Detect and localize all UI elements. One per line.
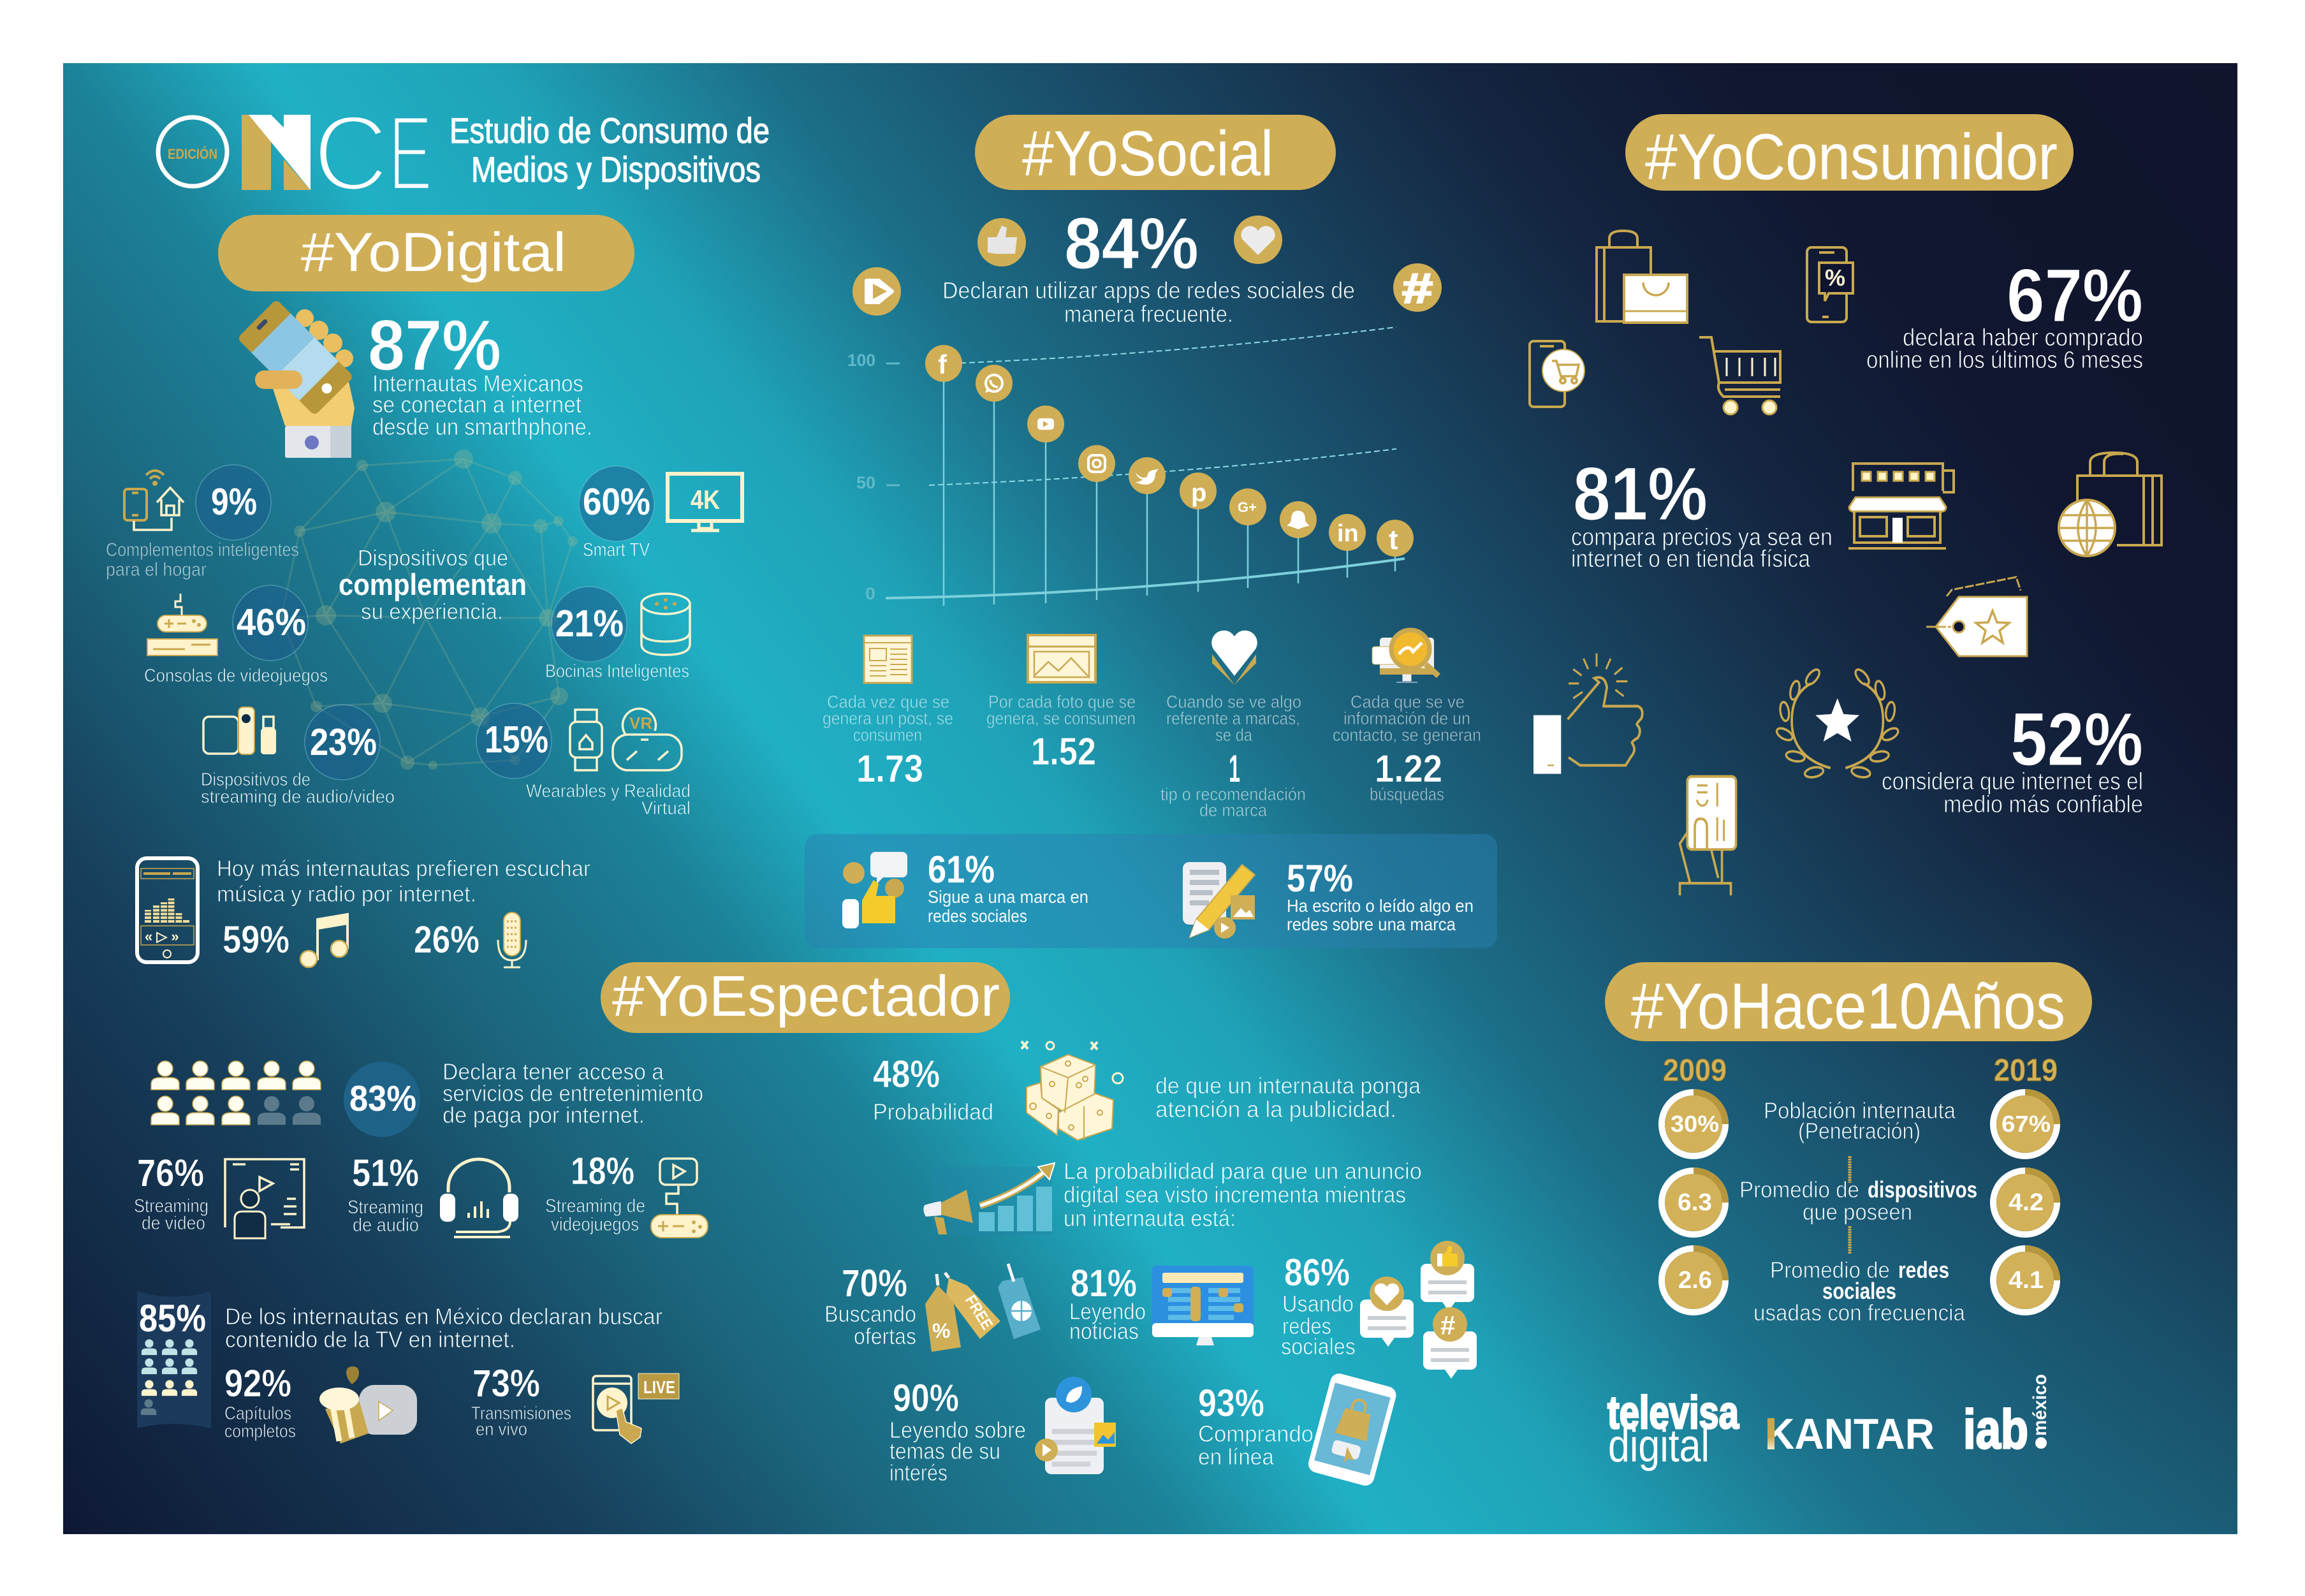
text: hoy más internautas: Hoy más internautas prefieren escuchar bbox=[217, 856, 590, 881]
icon: phone with cart bubble bbox=[1530, 341, 1584, 407]
text: cuando se ve algo 1 tip: de marca bbox=[1199, 800, 1267, 820]
stat: 81% leyendo noticias bbox=[1069, 1262, 1146, 1344]
text: cuando se ve algo 1 tip: 1 bbox=[1229, 747, 1240, 790]
stat: 67%: 67% bbox=[2007, 254, 2143, 338]
stat: 76% streaming de video: de video bbox=[142, 1213, 205, 1234]
stat: 15% wearables y realidad virtual: Virtual bbox=[641, 798, 691, 819]
stat: 26% radio bbox=[414, 912, 526, 967]
stat: 92% capítulos completos: 92% bbox=[224, 1362, 291, 1405]
stat: 81% leyendo noticias: 81% bbox=[1071, 1262, 1137, 1305]
logo: ONCE edición: E bbox=[388, 93, 432, 213]
chart: social app usage: f bbox=[938, 349, 948, 379]
stat: 18% streaming de videojuegos: videojuegos bbox=[551, 1214, 639, 1235]
text: cada que se ve 1.22 bbox=[1333, 692, 1481, 804]
stat: 57%: redes sobre una marca bbox=[1287, 914, 1456, 934]
text: declaran utilizar apps bbox=[942, 277, 1355, 327]
logo: televisa digital: televisa bbox=[1607, 1387, 1739, 1439]
text: cada que se ve 1.22: Cada que se ve bbox=[1350, 692, 1465, 712]
stat: 48% probabilidad: 48% bbox=[873, 1053, 940, 1095]
stat: 90% leyendo sobre temas: Leyendo sobre bbox=[889, 1417, 1026, 1443]
stat: 51% streaming de audio: Streaming bbox=[348, 1197, 423, 1218]
stat: 83% bbox=[344, 1062, 420, 1137]
icon: hand holding smartphone bbox=[237, 299, 355, 458]
stat: 67%: online en los últimos 6 meses bbox=[1866, 347, 2143, 374]
stat: 73% transmisiones en vivo bbox=[471, 1362, 571, 1440]
text: por cada foto 1.52 bbox=[986, 692, 1136, 773]
stat: 59% music: 59% bbox=[223, 918, 289, 961]
axis labels: 100 bbox=[847, 351, 875, 370]
stat: 61%: Sigue a una marca en bbox=[928, 887, 1088, 907]
rings: 2009 values: 6.3 bbox=[1678, 1189, 1712, 1216]
stat: 73% transmisiones en vivo: Transmisiones bbox=[471, 1403, 571, 1424]
text: de los internautas en México bbox=[225, 1303, 662, 1352]
stat: 52% bbox=[1882, 698, 2143, 818]
stat: 76% streaming de video: Streaming bbox=[134, 1196, 209, 1217]
stat: 86% usando redes sociales: 86% bbox=[1284, 1251, 1350, 1294]
text: promedio de dispositivos: que poseen bbox=[1803, 1199, 1912, 1225]
panel: YoEspectador bbox=[134, 962, 1477, 1488]
text: promedio de redes sociales: sociales bbox=[1822, 1278, 1896, 1304]
icon: popcorn and screen bbox=[319, 1366, 417, 1444]
chart: social app usage: in bbox=[1337, 520, 1359, 547]
stat: 81%: 81% bbox=[1573, 452, 1708, 536]
text: promedio de dispositivos bbox=[1739, 1176, 1977, 1225]
percentage circles bbox=[196, 465, 654, 780]
panel: YoDigital bbox=[106, 215, 742, 967]
stat: 61%: redes sociales bbox=[928, 906, 1027, 926]
stat: 70% buscando ofertas: Buscando bbox=[824, 1301, 916, 1327]
stat: 51% streaming de audio: 51% bbox=[352, 1152, 419, 1194]
rings: 2019 values: 4.2 bbox=[2009, 1189, 2044, 1216]
stat: 15% wearables y realidad virtual: 15% bbox=[485, 719, 548, 761]
text: internautas mexicanos: se conectan a internet bbox=[372, 392, 582, 418]
stat: 92% capítulos completos: Capítulos bbox=[224, 1403, 291, 1424]
stat: 60% Smart TV: 60% bbox=[583, 481, 650, 523]
axis labels: 50 bbox=[856, 473, 875, 492]
stat: 18% streaming de videojuegos bbox=[545, 1150, 645, 1235]
heading: #YoSocial: #YoSocial bbox=[1022, 118, 1273, 189]
icon: streaming devices bbox=[203, 707, 276, 754]
stat: 57%: 57% bbox=[1287, 857, 1353, 900]
text: cuando se ve algo 1 tip: referente a marcas, bbox=[1166, 708, 1300, 728]
stat: 9% complementos inteligentes: Complementos inteligentes bbox=[106, 539, 299, 560]
icon: 4K TV bbox=[668, 474, 742, 531]
heading: #YoDigital: #YoDigital bbox=[301, 222, 566, 283]
text: declaran utilizar apps: Declaran utilizar apps de redes sociales de bbox=[942, 277, 1355, 304]
text: de que un internauta: atención a la publicidad. bbox=[1155, 1096, 1396, 1122]
stat: 76% streaming de video bbox=[134, 1152, 209, 1234]
text: declara tener acceso bbox=[443, 1058, 703, 1128]
stat: 67% bbox=[1866, 254, 2143, 374]
stat: 57% bbox=[1287, 857, 1474, 934]
stat: 90% leyendo sobre temas bbox=[889, 1377, 1026, 1486]
stat: 81% bbox=[1571, 452, 1833, 573]
icon: document with leaf bbox=[1035, 1377, 1116, 1474]
icon: social bubbles bbox=[1360, 1241, 1477, 1379]
icon: headphones bbox=[440, 1159, 518, 1237]
text: promedio de dispositivos: dispositivos bbox=[1868, 1176, 1977, 1203]
stat: 93% comprando en línea: 93% bbox=[1198, 1382, 1264, 1424]
stat: 86% usando redes sociales bbox=[1281, 1251, 1356, 1359]
text: de los internautas en México: De los internautas en México declaran buscar bbox=[225, 1303, 662, 1329]
text: internautas mexicanos: desde un smarthphone. bbox=[372, 414, 592, 440]
text: cuando se ve algo 1 tip bbox=[1160, 692, 1306, 820]
icon: monitor with ads bbox=[1152, 1266, 1254, 1345]
stat: 23% dispositivos de streaming: streaming de audio/video bbox=[201, 787, 395, 807]
stat: 90% leyendo sobre temas: temas de su bbox=[889, 1438, 1000, 1464]
stat: 9% complementos inteligentes: 9% bbox=[211, 481, 257, 523]
text: internautas mexicanos: Internautas Mexicanos bbox=[372, 370, 583, 397]
icon: heart bbox=[1211, 631, 1257, 685]
stat: 81% leyendo noticias: Leyendo bbox=[1069, 1298, 1146, 1324]
icon: store bbox=[1848, 464, 1954, 548]
text: la probabilidad: un internauta está: bbox=[1064, 1205, 1236, 1231]
stat: 81% leyendo noticias: noticias bbox=[1069, 1318, 1139, 1344]
stat: 70% buscando ofertas: ofertas bbox=[854, 1323, 916, 1349]
banner: 85% audience bbox=[137, 1291, 211, 1428]
text: hoy más internautas: música y radio por internet. bbox=[217, 882, 476, 907]
heading: #YoDigital bbox=[218, 215, 634, 291]
text: la probabilidad: digital sea visto incrementa mientras bbox=[1064, 1182, 1406, 1208]
people grid 83% bbox=[151, 1061, 321, 1125]
stat: 18% streaming de videojuegos: 18% bbox=[571, 1150, 634, 1192]
logo: iab méxico: méxico bbox=[2030, 1374, 2051, 1436]
stat: 92% capítulos completos bbox=[224, 1362, 296, 1442]
icon: price tags: FREE bbox=[962, 1292, 996, 1333]
stat: 86% usando redes sociales: sociales bbox=[1281, 1333, 1356, 1359]
banner: 85% audience: 85% bbox=[139, 1297, 206, 1340]
panel: YoSocial bbox=[805, 115, 1497, 948]
stat: 23% dispositivos de streaming: 23% bbox=[310, 721, 377, 763]
icon: megaphone and growth bars bbox=[923, 1163, 1055, 1235]
heading: #YoConsumidor: #YoConsumidor bbox=[1645, 121, 2058, 193]
icon: phone with shopping bag bbox=[1306, 1372, 1398, 1488]
logo: iab méxico bbox=[1963, 1374, 2051, 1460]
stat: 21% bocinas inteligentes bbox=[545, 603, 689, 682]
text: de que un internauta: de que un internauta ponga bbox=[1155, 1073, 1421, 1099]
stat: 81%: internet o en tienda física bbox=[1571, 546, 1811, 573]
icon: live stream: LIVE bbox=[643, 1377, 675, 1397]
icon: shopping cart bbox=[1699, 337, 1780, 414]
text: dispositivos que complementan su experiencia bbox=[339, 546, 527, 624]
logo: ONCE edición: C bbox=[313, 93, 388, 213]
text: declara tener acceso: Declara tener acceso a bbox=[443, 1058, 664, 1085]
text: declara tener acceso: de paga por internet. bbox=[443, 1102, 645, 1128]
text: de los internautas en México: contenido de la TV en internet. bbox=[225, 1326, 515, 1352]
stat: 52%: considera que internet es el bbox=[1882, 768, 2143, 795]
stat: 76% streaming de video: 76% bbox=[137, 1152, 204, 1194]
stat: 15% wearables y realidad virtual: Wearables y Realidad bbox=[526, 781, 691, 802]
text: cada vez que se genera un post 1.73: 1.73 bbox=[856, 747, 923, 790]
stat: 86% usando redes sociales: redes bbox=[1282, 1313, 1331, 1339]
rings: 2019 values: 4.1 bbox=[2009, 1267, 2044, 1294]
stat: 70% buscando ofertas: 70% bbox=[842, 1262, 907, 1305]
icon: pencil and document bbox=[1183, 862, 1255, 939]
text: cuando se ve algo 1 tip: Cuando se ve algo bbox=[1166, 692, 1301, 712]
text: internautas mexicanos bbox=[372, 370, 592, 440]
text: cada vez que se genera un post 1.73: consumen bbox=[853, 725, 922, 745]
stat: 15% wearables y realidad virtual bbox=[485, 719, 691, 819]
icon: price tags: % bbox=[932, 1319, 950, 1342]
text: dispositivos que complementan su experiencia: su experiencia. bbox=[361, 599, 503, 624]
heading: #YoHace10Años: #YoHace10Años bbox=[1631, 970, 2065, 1043]
stat: 70% buscando ofertas bbox=[824, 1262, 916, 1349]
text: cada que se ve 1.22: contacto, se generan bbox=[1333, 725, 1481, 745]
text: población internauta bbox=[1764, 1097, 1956, 1144]
icon: shopping bags bbox=[1597, 231, 1687, 323]
decorative sphere bbox=[276, 450, 578, 770]
stat: 57%: Ha escrito o leído algo en bbox=[1287, 896, 1474, 916]
icon: globe shopping bag bbox=[2059, 453, 2162, 556]
stat: 60% Smart TV: Smart TV bbox=[583, 539, 650, 560]
logo: televisa digital: digital bbox=[1608, 1421, 1709, 1472]
icon: game console bbox=[147, 594, 217, 655]
stat: 93% comprando en línea: Comprando bbox=[1198, 1421, 1313, 1447]
text: declara tener acceso: servicios de entretenimiento bbox=[443, 1080, 703, 1106]
icon: thumbs up bbox=[1533, 654, 1643, 774]
rings: 2019 values: 67% bbox=[2001, 1111, 2051, 1137]
stat: 60% Smart TV bbox=[583, 481, 650, 560]
icon: dice bbox=[1021, 1041, 1123, 1140]
text: por cada foto 1.52: Por cada foto que se bbox=[988, 692, 1136, 712]
icon: thumbs up with bubbles bbox=[842, 852, 907, 928]
text: cada que se ve 1.22: búsquedas bbox=[1370, 784, 1444, 804]
rings: 2009 values: 30% bbox=[1671, 1111, 1719, 1137]
icon: post bbox=[864, 636, 912, 683]
icon: smartwatch and VR headset bbox=[570, 708, 682, 770]
stat: 61% bbox=[928, 848, 1088, 926]
logo: iab méxico: iab bbox=[1963, 1399, 2028, 1460]
stat: 46% consolas de videojuegos bbox=[144, 601, 328, 686]
stat: 83%: 83% bbox=[349, 1078, 416, 1119]
icon: live stream bbox=[593, 1373, 679, 1444]
logo: ONCE edición bbox=[158, 93, 432, 213]
icon: smartwatch and VR headset: VR bbox=[629, 714, 652, 733]
chart: social app usage bbox=[847, 327, 1414, 606]
text: promedio de dispositivos: Promedio de bbox=[1739, 1176, 1859, 1203]
text: población internauta: (Penetración) bbox=[1798, 1118, 1921, 1144]
stat: 84%: 84% bbox=[1064, 203, 1199, 284]
icon: phone with discount: % bbox=[1825, 265, 1845, 291]
stat: 59% music bbox=[223, 914, 348, 967]
text: cuando se ve algo 1 tip: tip o recomendación bbox=[1160, 784, 1306, 804]
stat: 46% consolas de videojuegos: Consolas de videojuegos bbox=[144, 666, 328, 686]
coins: social networks bbox=[925, 345, 1414, 557]
title: Estudio de Consumo de Medios y Dispositivos bbox=[450, 110, 770, 189]
text: dispositivos que complementan su experiencia: Dispositivos que bbox=[358, 546, 508, 571]
logo: ONCE edición: EDICIÓN bbox=[168, 146, 217, 162]
stat: 51% streaming de audio: de audio bbox=[353, 1215, 419, 1236]
text: por cada foto 1.52: 1.52 bbox=[1031, 730, 1096, 773]
stat: 52%: 52% bbox=[2010, 698, 2143, 782]
icon: social bubbles: # bbox=[1440, 1310, 1455, 1340]
logo: KANTAR: KANTAR bbox=[1765, 1410, 1935, 1458]
chart: social app usage: p bbox=[1191, 479, 1206, 507]
text: de que un internauta bbox=[1155, 1073, 1421, 1122]
stat: 23% dispositivos de streaming: Dispositivos de bbox=[201, 770, 311, 790]
stat: 87%: 87% bbox=[368, 305, 501, 385]
icon: music phone: « ▷ » bbox=[145, 928, 179, 944]
stat: 52%: medio más confiable bbox=[1943, 791, 2143, 818]
icon: magnifier search bbox=[1372, 630, 1438, 682]
text: hoy más internautas bbox=[217, 856, 590, 907]
stat: 61%: 61% bbox=[928, 848, 995, 891]
stat: 48% probabilidad: Probabilidad bbox=[873, 1099, 993, 1125]
title: Estudio de Consumo de Medios y Dispositivos: Medios y Dispositivos bbox=[471, 149, 761, 189]
chart: social app usage: G+ bbox=[1238, 499, 1257, 515]
text: la probabilidad: La probabilidad para que un anuncio bbox=[1064, 1158, 1422, 1184]
stat: 73% transmisiones en vivo: en vivo bbox=[476, 1419, 527, 1440]
stat: 86% usando redes sociales: Usando bbox=[1282, 1291, 1354, 1317]
text: cada que se ve 1.22: información de un bbox=[1343, 708, 1470, 728]
rings: 2009 values bbox=[1662, 1092, 1725, 1312]
icon: video player bbox=[225, 1159, 304, 1238]
title: Estudio de Consumo de Medios y Dispositivos: Estudio de Consumo de bbox=[450, 110, 770, 150]
icon: price tag with star bbox=[1926, 577, 2027, 656]
icon: photo bbox=[1028, 635, 1095, 682]
panel: YoHace10Años bbox=[1605, 962, 2092, 1472]
stat: 90% leyendo sobre temas: 90% bbox=[893, 1377, 959, 1419]
stat: 46% consolas de videojuegos: 46% bbox=[237, 601, 306, 643]
heading: #YoEspectador: #YoEspectador bbox=[612, 965, 1000, 1029]
text: cada vez que se genera un post 1.73: Cada vez que se bbox=[827, 692, 949, 712]
stat: 9% complementos inteligentes bbox=[106, 481, 299, 580]
stat: 93% comprando en línea bbox=[1198, 1382, 1313, 1470]
text: cada vez que se genera un post 1.73 bbox=[823, 692, 953, 790]
icon: card in hand bbox=[1680, 777, 1736, 895]
stat: 81%: compara precios ya sea en bbox=[1571, 524, 1833, 551]
logo: televisa digital bbox=[1607, 1387, 1739, 1472]
stat: 23% dispositivos de streaming bbox=[201, 721, 395, 807]
year labels bbox=[1663, 1053, 2058, 1088]
callout: brand follow panel bbox=[805, 834, 1497, 948]
panel: YoConsumidor bbox=[1530, 114, 2162, 895]
icon: phone with discount bbox=[1807, 247, 1853, 322]
text: cada que se ve 1.22: 1.22 bbox=[1375, 747, 1442, 790]
text: dispositivos que complementan su experiencia: complementan bbox=[339, 567, 527, 601]
icon: smart home bbox=[124, 471, 184, 530]
icon: game stream bbox=[651, 1159, 708, 1238]
text: la probabilidad bbox=[1064, 1158, 1422, 1231]
year labels: 2009 bbox=[1663, 1053, 1727, 1088]
stat: 92% capítulos completos: completos bbox=[224, 1421, 296, 1442]
text: por cada foto 1.52: genera, se consumen bbox=[986, 708, 1136, 728]
icon: smart speaker bbox=[641, 594, 690, 655]
stat: 18% streaming de videojuegos: Streaming de bbox=[545, 1196, 645, 1217]
stat: 90% leyendo sobre temas: interés bbox=[889, 1460, 948, 1486]
text: promedio de redes sociales: Promedio de bbox=[1770, 1257, 1890, 1283]
stat: 67%: declara haber comprado bbox=[1903, 325, 2143, 351]
axis labels bbox=[847, 351, 875, 603]
text: promedio de redes sociales: usadas con frecuencia bbox=[1753, 1299, 1966, 1326]
stat: 9% complementos inteligentes: para el hogar bbox=[106, 559, 207, 580]
icon badges: like, heart, play, hashtag bbox=[852, 216, 1442, 316]
stat: 21% bocinas inteligentes: 21% bbox=[555, 603, 624, 645]
stat: 73% transmisiones en vivo: 73% bbox=[472, 1362, 540, 1405]
icon badges: like, heart, play, hashtag: # bbox=[1402, 265, 1433, 312]
rings: 2009 values: 2.6 bbox=[1678, 1267, 1712, 1294]
icon: 4K TV: 4K bbox=[691, 485, 720, 515]
text: declaran utilizar apps: manera frecuente. bbox=[1064, 301, 1233, 327]
text: promedio de redes sociales: redes bbox=[1898, 1257, 1949, 1283]
icon: price tags bbox=[925, 1264, 1041, 1352]
icon: laurel star bbox=[1775, 667, 1899, 779]
stat: 26% radio: 26% bbox=[414, 918, 479, 961]
stat: 48% probabilidad bbox=[873, 1053, 993, 1125]
chart: social app usage: t bbox=[1389, 524, 1398, 555]
stat: 21% bocinas inteligentes: Bocinas Inteligentes bbox=[545, 661, 689, 682]
text: cuando se ve algo 1 tip: se da bbox=[1215, 725, 1252, 745]
text: promedio de redes sociales bbox=[1753, 1257, 1966, 1326]
stat: 51% streaming de audio bbox=[348, 1152, 423, 1236]
stat: 93% comprando en línea: en línea bbox=[1198, 1444, 1275, 1470]
text: población internauta: Población internauta bbox=[1764, 1097, 1956, 1124]
rings: 2019 values bbox=[1993, 1092, 2057, 1312]
icon: music phone bbox=[137, 858, 198, 962]
axis labels: 0 bbox=[865, 584, 875, 603]
text: cada vez que se genera un post 1.73: genera un post, se bbox=[823, 708, 953, 728]
year labels: 2019 bbox=[1994, 1053, 2058, 1088]
